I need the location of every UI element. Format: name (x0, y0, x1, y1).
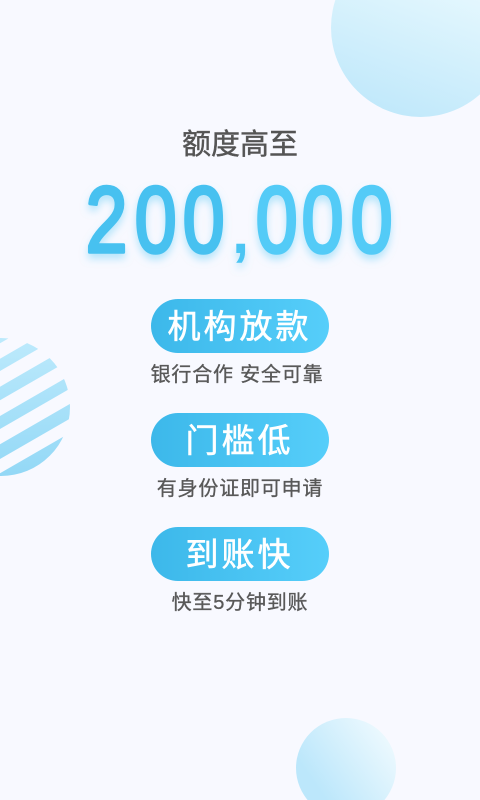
text: arrival time: 快至5分钟到账 (172, 592, 308, 614)
decorative circle: top right (331, 0, 480, 117)
amount: 200,000: , (232, 198, 249, 267)
pill: lender disbursement: 机构放款 (168, 308, 312, 345)
amount: 200,000: 200 (86, 168, 225, 273)
pill: low threshold: 门槛低 (186, 422, 294, 459)
pill: fast funding: 到账快 (186, 536, 294, 573)
decorative striped circle: left (0, 338, 70, 476)
pill: lender disbursement (151, 299, 329, 353)
amount: 200,000 (84, 168, 396, 273)
text: ID requirement: 有身份证即可申请 (157, 478, 323, 500)
pill: low threshold (151, 413, 329, 467)
heading: credit limit: 额度高至 (182, 129, 298, 161)
text: bank cooperation: 银行合作 安全可靠 (151, 364, 323, 386)
pill: fast funding (151, 527, 329, 581)
amount: 200,000: 000 (256, 168, 393, 273)
decorative circle: bottom right (296, 718, 396, 800)
